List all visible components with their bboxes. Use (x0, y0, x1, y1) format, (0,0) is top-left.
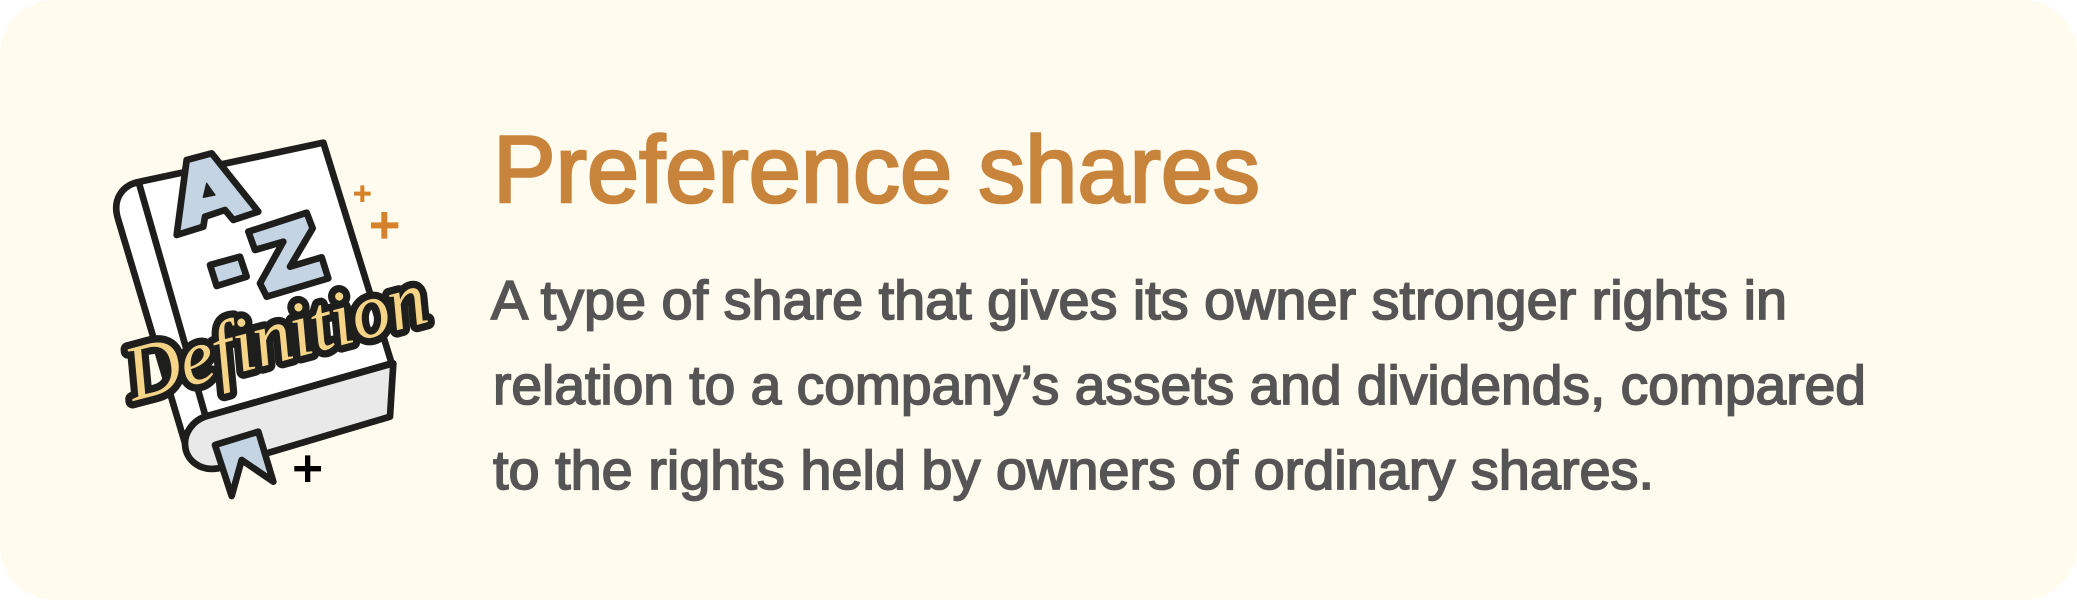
bookmark (215, 432, 273, 496)
line 1: A type of share that gives its owner stronger rights in (491, 269, 1787, 331)
book pages (185, 363, 393, 469)
orange sparkle large (371, 212, 398, 239)
dash between letters (210, 257, 247, 286)
book cover (116, 143, 392, 443)
definition text (491, 269, 1866, 501)
book spine line (139, 183, 206, 417)
line 3: to the rights held by owners of ordinary shares. (493, 439, 1654, 501)
orange sparkle small (354, 185, 371, 202)
line 2: relation to a company’s assets and dividends, compared (493, 354, 1866, 416)
icon: definition book (114, 143, 436, 496)
definition lettering: Definition (114, 254, 436, 418)
title: Preference shares (493, 117, 1260, 223)
letter Z (248, 213, 328, 297)
black sparkle (294, 455, 321, 482)
letter A (177, 153, 258, 235)
